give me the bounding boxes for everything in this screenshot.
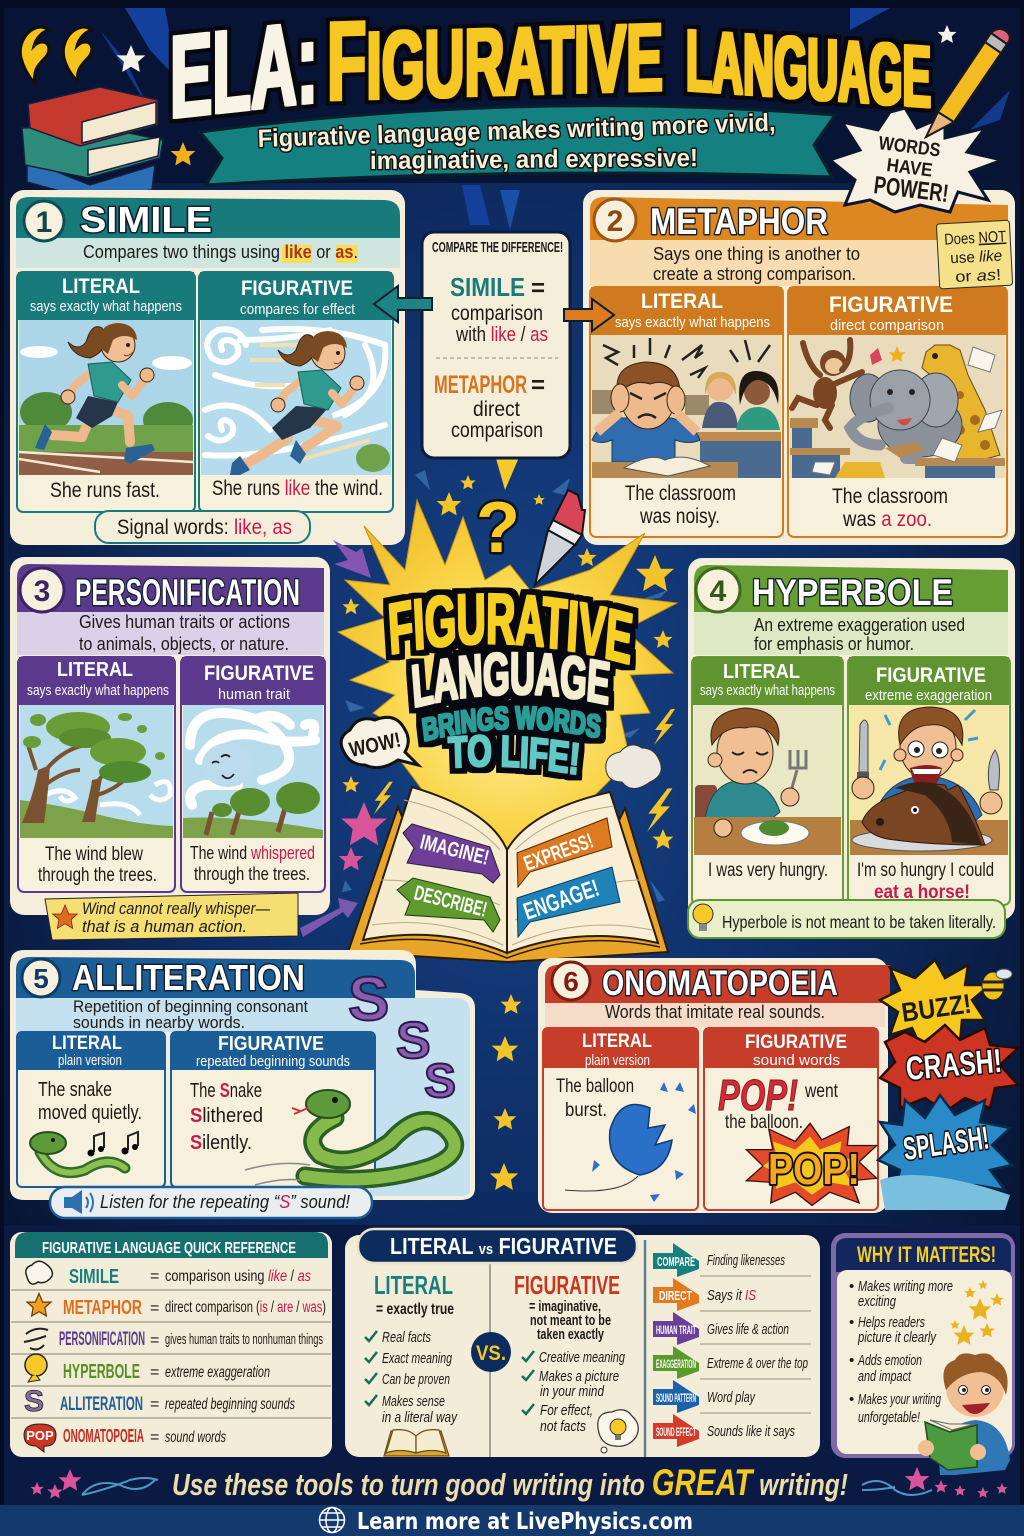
literal column: Makes sense bbox=[382, 1393, 445, 1410]
panel: compare the difference: direct bbox=[473, 398, 520, 421]
icon: star bbox=[938, 25, 956, 43]
panel: alliteration bbox=[10, 950, 475, 1200]
literal column: in a literal way bbox=[382, 1409, 458, 1426]
letters: repeating S: S bbox=[348, 965, 389, 1034]
description: Says one thing is another to bbox=[653, 244, 860, 264]
panel: simile bbox=[10, 190, 405, 545]
description bbox=[73, 997, 308, 1032]
figurative card bbox=[199, 272, 393, 512]
ribbon: describe bbox=[397, 878, 500, 932]
row: hyperbole: HYPERBOLE bbox=[63, 1361, 140, 1383]
decorative stars bbox=[490, 994, 521, 1190]
burst: buzz: BUZZ! bbox=[900, 988, 973, 1028]
panel: compare the difference: METAPHOR bbox=[434, 371, 527, 399]
arrow: purple top bbox=[333, 540, 371, 578]
description: Repetition of beginning consonant bbox=[73, 997, 308, 1016]
callout: wind cannot whisper: Wind cannot really whisper— bbox=[82, 899, 271, 918]
illustration: whispering wind bbox=[183, 705, 323, 838]
literal card: LITERAL bbox=[52, 1033, 122, 1054]
number badge: 1 bbox=[36, 206, 52, 239]
badge: vs bbox=[471, 1332, 511, 1372]
row: hyperbole: extreme exaggeration bbox=[165, 1364, 270, 1381]
number badge: 2 bbox=[607, 205, 623, 238]
icon: pencil bbox=[926, 29, 1010, 137]
literal card: burst. bbox=[565, 1100, 607, 1121]
panel: onomatopoeia bbox=[538, 958, 890, 1213]
figurative card bbox=[704, 1028, 878, 1210]
literal card: plain version bbox=[58, 1053, 122, 1069]
row: human trait: Gives life & action bbox=[707, 1321, 789, 1338]
literal card: I was very hungry. bbox=[708, 860, 828, 881]
number badge bbox=[696, 568, 740, 612]
figurative card: FIGURATIVE bbox=[218, 1033, 324, 1055]
pill: listen for the sound bbox=[50, 1187, 372, 1218]
row: alliteration: ALLITERATION bbox=[60, 1394, 143, 1415]
panel: metaphor bbox=[583, 190, 1015, 545]
figurative column: taken exactly bbox=[537, 1327, 604, 1343]
description bbox=[653, 244, 860, 284]
heading: PERSONIFICATION bbox=[75, 572, 300, 613]
row: metaphor bbox=[27, 1294, 326, 1319]
speech bubble: wow: WOW! bbox=[347, 729, 403, 762]
signal words pill bbox=[95, 511, 310, 543]
figurative card: compares for effect bbox=[240, 301, 356, 318]
hero heading: TO LIFE! bbox=[442, 734, 585, 780]
illustration: zoo classroom bbox=[790, 335, 1005, 478]
row: sound effect: SOUND EFFECT bbox=[656, 1425, 696, 1439]
literal card: LITERAL bbox=[57, 659, 133, 681]
bullet list: Makes your writing bbox=[858, 1391, 941, 1408]
bullet list: Adds emotion bbox=[857, 1352, 922, 1369]
row: compare: COMPARE bbox=[657, 1254, 695, 1269]
description: An extreme exaggeration used bbox=[754, 615, 965, 635]
ribbon: imagine: IMAGINE! bbox=[418, 831, 491, 870]
icon: speaker bbox=[64, 1190, 93, 1214]
icon: bulb thought bubble bbox=[598, 1410, 638, 1453]
illustration: hungry boy bbox=[694, 705, 841, 855]
title: ELA: bbox=[170, 0, 318, 143]
icon: fountain pen bbox=[535, 490, 585, 585]
callout: does not use like or as: Does NOT bbox=[944, 228, 1007, 249]
figurative card: repeated beginning sounds bbox=[196, 1054, 350, 1070]
literal card: The wind blew bbox=[45, 844, 143, 865]
hero heading: BRINGS WORDS bbox=[416, 700, 606, 748]
figurative card: eat a horse! bbox=[874, 882, 970, 903]
icon: gold star bbox=[171, 142, 195, 165]
bullet list: picture it clearly bbox=[857, 1329, 937, 1346]
callout: hyperbole note bbox=[688, 900, 1005, 938]
heading: ONOMATOPOEIA bbox=[602, 964, 838, 1003]
badge: vs: VS. bbox=[476, 1342, 506, 1365]
figurative card: extreme exaggeration bbox=[865, 687, 992, 704]
figurative card: Silently. bbox=[190, 1132, 252, 1154]
row: onomatopoeia: POP bbox=[26, 1428, 54, 1443]
figurative card: human trait bbox=[218, 686, 291, 703]
illustration: big snake bbox=[245, 1090, 455, 1185]
literal card: LITERAL bbox=[641, 290, 723, 313]
row: alliteration bbox=[24, 1385, 295, 1418]
row: exaggeration: Extreme & over the top bbox=[707, 1355, 808, 1372]
row: personification: PERSONIFICATION bbox=[59, 1329, 145, 1350]
row: direct bbox=[653, 1278, 756, 1311]
row: onomatopoeia bbox=[24, 1424, 226, 1452]
illustration: pop burst: POP! bbox=[768, 1145, 860, 1194]
panel: compare the difference: SIMILE bbox=[450, 272, 525, 302]
figurative card: The Snake bbox=[190, 1080, 262, 1102]
bullet list: Makes writing more bbox=[858, 1278, 953, 1295]
panel: compare the difference: COMPARE THE DIFFERENCE! bbox=[432, 239, 563, 256]
literal card bbox=[17, 272, 195, 512]
illustration: noisy classroom bbox=[592, 335, 781, 478]
question mark: ? bbox=[476, 488, 520, 568]
icon: light bulb bbox=[693, 904, 713, 931]
bullet list bbox=[849, 1278, 953, 1426]
callout: wind cannot whisper: that is a human action. bbox=[82, 917, 247, 936]
description: Gives human traits or actions bbox=[79, 612, 290, 632]
literal column: = exactly true bbox=[376, 1301, 454, 1318]
row: direct: Says it IS bbox=[707, 1287, 756, 1304]
figurative card: the balloon. bbox=[725, 1112, 803, 1133]
figurative column: not meant to be bbox=[530, 1313, 611, 1329]
figurative card: direct comparison bbox=[830, 317, 944, 334]
number badge: 3 bbox=[34, 575, 50, 608]
description bbox=[79, 612, 290, 654]
illustration: pop burst bbox=[746, 1123, 877, 1205]
footer bar bbox=[0, 1505, 1024, 1536]
stars and sparks bbox=[342, 475, 675, 849]
literal card bbox=[543, 1028, 698, 1210]
bullet list: • bbox=[849, 1391, 854, 1408]
panel: hyperbole bbox=[688, 558, 1015, 920]
central hero bbox=[264, 475, 999, 963]
literal card: plain version bbox=[585, 1052, 650, 1069]
footer bar: Learn more at LivePhysics.com bbox=[357, 1509, 693, 1535]
illustration: small snake bbox=[30, 1132, 138, 1173]
figurative card bbox=[848, 657, 1010, 905]
heading: METAPHOR bbox=[650, 201, 828, 242]
row: metaphor: = bbox=[150, 1300, 159, 1317]
literal card bbox=[692, 657, 843, 905]
illustration: burst balloon bbox=[565, 1082, 696, 1202]
illustration: eat a horse bbox=[850, 705, 1008, 855]
literal card: The snake bbox=[38, 1079, 112, 1101]
literal card: says exactly what happens bbox=[615, 314, 770, 331]
row: metaphor: direct comparison (is / are / was) bbox=[165, 1299, 326, 1316]
figurative card: Slithered bbox=[190, 1105, 263, 1127]
ribbon: describe: DESCRIBE! bbox=[412, 882, 489, 922]
literal card: The balloon bbox=[556, 1076, 634, 1097]
figurative column: = imaginative, bbox=[529, 1299, 601, 1315]
literal column: LITERAL bbox=[374, 1270, 453, 1300]
figurative column: Makes a picture bbox=[539, 1368, 619, 1385]
title bbox=[170, 0, 931, 143]
panel: compare the difference: = bbox=[531, 372, 545, 399]
row: compare bbox=[653, 1243, 785, 1277]
burst: words have power: HAVE bbox=[885, 155, 934, 182]
row: simile: = bbox=[150, 1268, 159, 1285]
illustration: boy reading bbox=[918, 1353, 1010, 1475]
heading: ALLITERATION bbox=[72, 957, 305, 998]
figurative column: not facts bbox=[540, 1418, 586, 1435]
row: direct: DIRECT bbox=[659, 1288, 692, 1303]
figurative card bbox=[788, 287, 1007, 537]
hero heading: FIGURATIVE bbox=[383, 587, 638, 670]
figurative card: FIGURATIVE bbox=[876, 664, 986, 687]
bullet list: exciting bbox=[858, 1293, 896, 1310]
figurative column: in your mind bbox=[540, 1383, 605, 1400]
row: sound pattern: Word play bbox=[707, 1389, 756, 1406]
bullet list: Helps readers bbox=[858, 1314, 925, 1331]
heading: HYPERBOLE bbox=[752, 572, 953, 613]
figurative card: FIGURATIVE bbox=[829, 292, 953, 317]
figurative card: She runs like the wind. bbox=[212, 477, 383, 500]
figurative card bbox=[181, 657, 325, 892]
icon: bee bbox=[982, 969, 1012, 1000]
row: alliteration: S bbox=[24, 1385, 44, 1418]
icon: stars bbox=[950, 1280, 1004, 1345]
bullet list: • bbox=[849, 1278, 854, 1295]
number badge: 4 bbox=[710, 575, 727, 608]
tagline: Use these tools to turn good writing into GREAT writing! bbox=[172, 1462, 848, 1503]
number badge: 5 bbox=[33, 963, 49, 994]
burst bbox=[338, 500, 677, 860]
open book bbox=[348, 787, 668, 962]
literal card bbox=[590, 287, 783, 537]
row: sound pattern: SOUND PATTERN bbox=[656, 1391, 696, 1405]
figurative card: FIGURATIVE bbox=[745, 1032, 847, 1053]
row: personification bbox=[24, 1329, 323, 1350]
figurative column: Creative meaning bbox=[539, 1349, 625, 1366]
figurative column bbox=[514, 1270, 638, 1453]
figurative card: FIGURATIVE bbox=[241, 277, 353, 300]
description: to animals, objects, or nature. bbox=[79, 634, 289, 654]
description: Words that imitate real sounds. bbox=[605, 1002, 825, 1022]
ribbon: imagine bbox=[403, 824, 500, 883]
figurative card: went bbox=[804, 1081, 839, 1102]
panel: why it matters bbox=[831, 1233, 1015, 1475]
panel: compare the difference: with like / as bbox=[455, 324, 548, 346]
ribbon: engage: ENGAGE! bbox=[520, 875, 603, 926]
literal card: says exactly what happens bbox=[27, 683, 169, 699]
figurative card: The classroom bbox=[832, 485, 948, 508]
row: sound pattern bbox=[653, 1380, 756, 1413]
icon: white star bbox=[117, 45, 145, 72]
bullet list: unforgetable! bbox=[858, 1409, 921, 1426]
literal column bbox=[365, 1270, 458, 1456]
figurative card bbox=[171, 1032, 375, 1187]
title: LANGUAGE bbox=[686, 11, 931, 126]
row: human trait bbox=[653, 1312, 789, 1345]
number badge bbox=[552, 962, 590, 1000]
heading: SIMILE bbox=[80, 199, 212, 240]
row: sound effect bbox=[653, 1414, 795, 1447]
row: exaggeration: EXAGGERATION bbox=[656, 1357, 696, 1371]
hero heading bbox=[383, 587, 638, 780]
arrow: purple bottom bbox=[300, 898, 358, 937]
callout: wind cannot whisper bbox=[45, 893, 298, 940]
literal card: The classroom bbox=[625, 482, 736, 505]
literal card: LITERAL bbox=[582, 1031, 652, 1052]
panel: compare the difference bbox=[422, 232, 570, 490]
panel: compare the difference: = bbox=[531, 275, 545, 302]
burst: splash bbox=[878, 1095, 1012, 1210]
row: onomatopoeia: ONOMATOPOEIA bbox=[63, 1426, 144, 1446]
callout: does not use like or as: or as! bbox=[955, 267, 1002, 286]
literal card: LITERAL bbox=[62, 275, 140, 298]
figurative card: The wind whispered bbox=[190, 842, 315, 863]
panel: literal vs figurative bbox=[345, 1229, 820, 1457]
burst: words have power: POWER! bbox=[872, 171, 950, 208]
burst: crash bbox=[880, 1025, 1018, 1112]
arrow: compare to metaphor bbox=[564, 299, 614, 331]
subtitle banner: imaginative, and expressive! bbox=[370, 144, 698, 175]
literal column: Exact meaning bbox=[382, 1350, 452, 1367]
illustration: trees in wind bbox=[20, 705, 173, 838]
row: hyperbole bbox=[25, 1354, 270, 1383]
row: simile: SIMILE bbox=[69, 1266, 119, 1288]
literal card: was noisy. bbox=[639, 505, 720, 528]
callout: does not use like or as: use like bbox=[950, 248, 1003, 267]
letters: repeating S: S bbox=[396, 1012, 431, 1070]
burst: words have power bbox=[830, 108, 1002, 212]
row: simile bbox=[26, 1261, 311, 1288]
figurative column: For effect, bbox=[540, 1402, 593, 1419]
description: for emphasis or humor. bbox=[754, 634, 914, 654]
literal card bbox=[17, 1032, 165, 1187]
row: compare: Finding likenesses bbox=[707, 1252, 785, 1269]
callout: does not use like or as bbox=[936, 220, 1013, 289]
literal card: moved quietly. bbox=[38, 1102, 142, 1124]
icon: quotation marks bbox=[20, 27, 92, 84]
row: human trait: HUMAN TRAIT bbox=[656, 1323, 696, 1337]
burst: words have power: WORDS bbox=[877, 133, 941, 162]
literal card: says exactly what happens bbox=[700, 683, 835, 699]
row: metaphor: METAPHOR bbox=[63, 1297, 142, 1319]
panel: compare the difference: comparison bbox=[451, 419, 543, 442]
figurative card: FIGURATIVE bbox=[204, 662, 314, 685]
bullet list: and impact bbox=[858, 1368, 912, 1385]
number badge bbox=[20, 568, 64, 612]
icon: stack of books bbox=[22, 87, 163, 198]
ribbon: express bbox=[517, 818, 612, 887]
literal card bbox=[18, 657, 175, 892]
literal column: Can be proven bbox=[382, 1371, 450, 1388]
number badge bbox=[594, 199, 636, 241]
pill: listen for the sound: Listen for the repeating “S” sound! bbox=[100, 1192, 350, 1212]
literal card: LITERAL bbox=[723, 661, 800, 683]
letters: repeating S bbox=[348, 965, 456, 1108]
row: personification: gives human traits to nonhuman things bbox=[165, 1331, 323, 1348]
heading pill: LITERAL vs FIGURATIVE bbox=[390, 1233, 617, 1259]
row: hyperbole: = bbox=[150, 1364, 159, 1381]
illustration: girl in the wind bbox=[201, 320, 391, 475]
figurative column: FIGURATIVE bbox=[514, 1270, 620, 1300]
literal card: through the trees. bbox=[38, 865, 157, 886]
literal column: Real facts bbox=[382, 1329, 431, 1346]
hero heading: LANGUAGE bbox=[406, 646, 616, 714]
panel: compare the difference: comparison bbox=[451, 302, 543, 325]
figurative card: was a zoo. bbox=[842, 508, 932, 531]
panel: personification bbox=[10, 557, 330, 915]
description: sounds in nearby words. bbox=[73, 1013, 245, 1032]
row: sound effect: Sounds like it says bbox=[707, 1423, 795, 1440]
number badge bbox=[22, 959, 60, 997]
icon: book bbox=[384, 1430, 449, 1456]
figurative card: through the trees. bbox=[194, 863, 310, 884]
signal words pill: Signal words: like, as bbox=[117, 516, 292, 539]
literal card: She runs fast. bbox=[50, 479, 160, 502]
ribbon: express: EXPRESS! bbox=[521, 829, 596, 876]
cloud bbox=[606, 745, 661, 788]
heading pill bbox=[358, 1229, 637, 1263]
title: FIGURATIVE bbox=[327, 0, 663, 124]
letters: repeating S: S bbox=[424, 1055, 456, 1108]
illustration: girl running bbox=[19, 320, 193, 475]
burst: buzz bbox=[880, 960, 1012, 1045]
description: create a strong comparison. bbox=[653, 264, 856, 284]
number badge bbox=[24, 201, 64, 241]
bullet list: • bbox=[849, 1352, 854, 1369]
bullet list: • bbox=[849, 1314, 854, 1331]
description bbox=[754, 615, 965, 654]
number badge: 6 bbox=[563, 966, 579, 997]
row: alliteration: repeated beginning sounds bbox=[165, 1396, 295, 1413]
speech bubble: wow bbox=[341, 717, 418, 768]
subtitle banner bbox=[200, 106, 835, 185]
row: onomatopoeia: sound words bbox=[165, 1429, 226, 1446]
icon: globe bbox=[320, 1508, 344, 1532]
figurative card: POP! bbox=[718, 1071, 798, 1120]
description: Compares two things using like or as. bbox=[83, 242, 358, 262]
row: personification: = bbox=[150, 1332, 159, 1349]
literal card: says exactly what happens bbox=[30, 298, 182, 315]
arrow list bbox=[653, 1243, 811, 1447]
subtitle banner: Figurative language makes writing more vivid, bbox=[257, 109, 776, 153]
row: exaggeration bbox=[653, 1346, 808, 1379]
figurative card: sound words bbox=[753, 1052, 840, 1069]
heading: FIGURATIVE LANGUAGE QUICK REFERENCE bbox=[42, 1240, 296, 1257]
panel: quick reference bbox=[10, 1232, 332, 1457]
row: onomatopoeia: = bbox=[150, 1429, 159, 1446]
row: alliteration: = bbox=[150, 1396, 159, 1413]
ribbon: engage bbox=[517, 867, 620, 937]
row: simile: comparison using like / as bbox=[165, 1268, 311, 1285]
arrow: compare to simile bbox=[374, 286, 432, 322]
